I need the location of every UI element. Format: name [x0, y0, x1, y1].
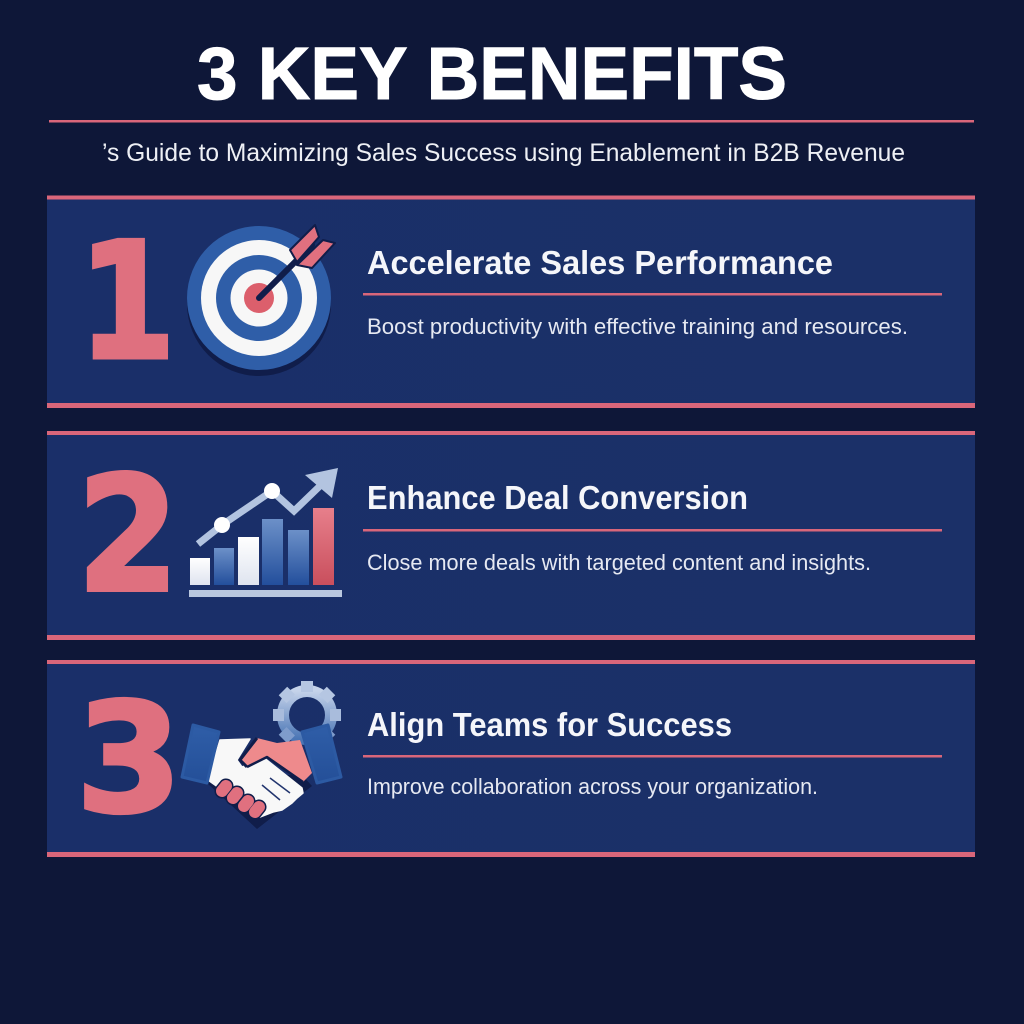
panel: benefit 3 — [47, 660, 975, 857]
number 1: 1 — [79, 210, 175, 395]
icon: growth chart — [189, 468, 342, 597]
panel: benefit 2 — [47, 431, 975, 640]
text: benefit 1: Boost productivity with effective training and resources. — [367, 314, 908, 339]
title: 3 KEY BENEFITS — [197, 32, 787, 115]
heading: benefit 3: Align Teams for Success — [367, 706, 732, 743]
number 3: 3 — [76, 671, 182, 847]
icon: gear — [273, 681, 341, 743]
number 2: 2 — [77, 443, 179, 629]
heading: benefit 1: Accelerate Sales Performance — [367, 244, 833, 281]
panel: benefit 1 — [47, 196, 975, 408]
text: benefit 2: Close more deals with targeted content and insights. — [367, 550, 871, 575]
subtitle: ’s Guide to Maximizing Sales Success using Enablement in B2B Revenue — [102, 139, 905, 167]
heading: benefit 2: Enhance Deal Conversion — [367, 479, 748, 516]
icon: target with arrow — [187, 225, 335, 376]
icon: handshake and gear — [182, 681, 341, 829]
text: benefit 3: Improve collaboration across your organization. — [367, 774, 818, 799]
